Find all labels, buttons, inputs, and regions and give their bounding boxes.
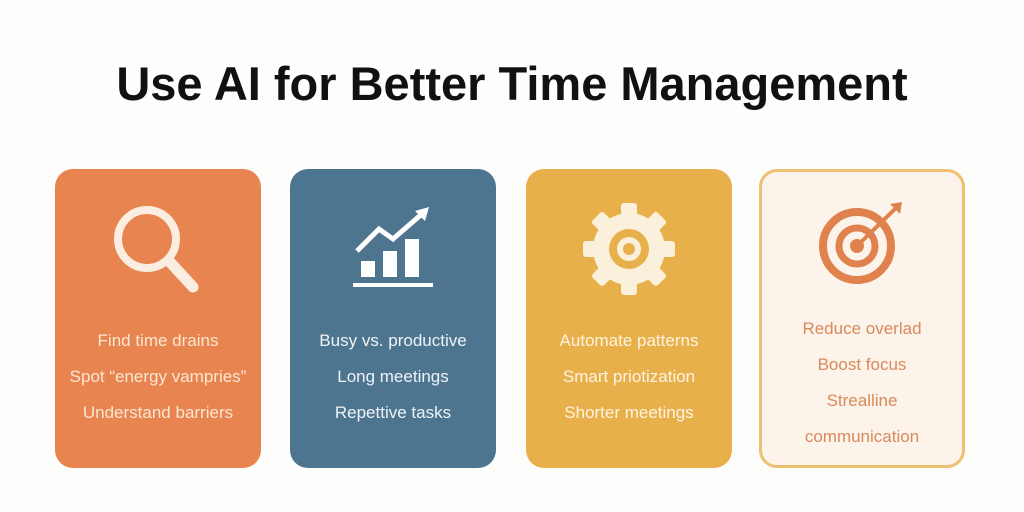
icon: magnifier — [114, 206, 198, 292]
text: Busy vs. productive — [319, 331, 467, 350]
panel: reduce overload — [759, 169, 965, 468]
panel: find time drains — [55, 169, 261, 468]
text — [319, 331, 467, 422]
icon: target — [819, 202, 902, 284]
text: Spot “energy vampries” — [70, 367, 246, 386]
panel: automate — [526, 169, 732, 468]
text: communication — [805, 427, 919, 446]
text — [802, 319, 922, 446]
text: Automate patterns — [560, 331, 698, 350]
text: Shorter meetings — [564, 403, 694, 422]
text — [70, 331, 246, 422]
text: Long meetings — [337, 367, 449, 386]
panel: busy vs productive — [290, 169, 496, 468]
text — [560, 331, 698, 422]
icon: gear — [583, 203, 675, 295]
text: Boost focus — [818, 355, 906, 374]
text: Find time drains — [98, 331, 218, 350]
text: Reduce overlad — [802, 319, 922, 338]
text: Smart priotization — [563, 367, 695, 386]
text: Understand barriers — [83, 403, 233, 422]
text: Strealline — [827, 391, 897, 410]
text: Repettive tasks — [335, 403, 451, 422]
icon: chart — [353, 207, 433, 287]
title: Use AI for Better Time Management — [116, 57, 908, 110]
